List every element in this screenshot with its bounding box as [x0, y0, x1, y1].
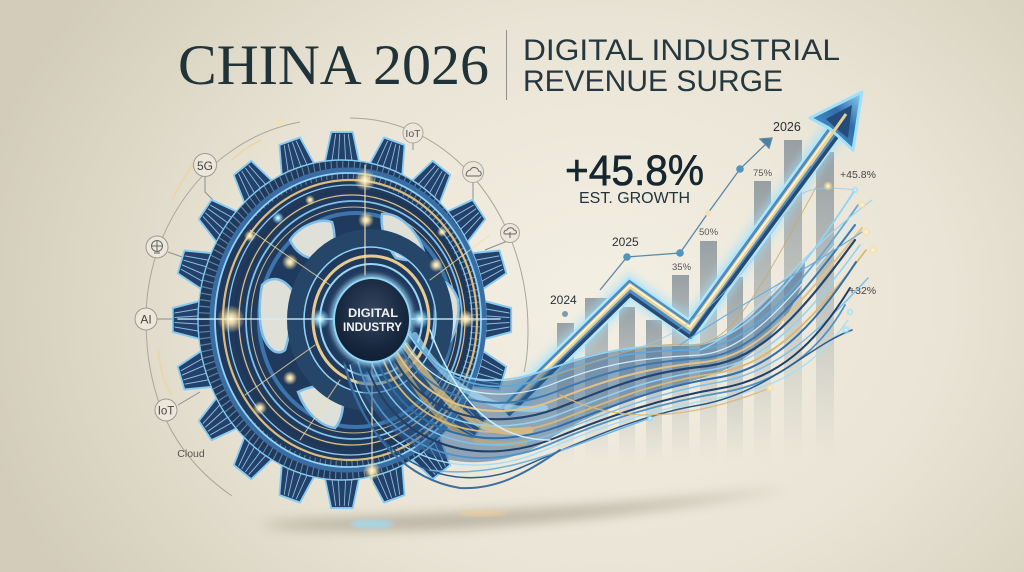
subtitle: Digital Industrial Revenue Surge: REVENUE SURGE	[523, 65, 783, 98]
gear teeth and body	[173, 132, 511, 508]
year and percent labels: +45.8%	[840, 169, 876, 181]
node: IoT left	[155, 399, 177, 421]
node: IoT left: IoT	[158, 406, 174, 418]
year and percent labels: 2024	[550, 293, 577, 307]
strand end sparks	[646, 181, 878, 422]
node: IoT top: IoT	[405, 128, 421, 140]
flare lines	[178, 165, 500, 495]
growth callout: EST. GROWTH	[579, 190, 690, 207]
year and percent labels: 35%	[672, 262, 692, 273]
growth callout: +45.8%	[565, 147, 704, 195]
year and percent labels: 75%	[753, 168, 773, 179]
technology orbit ring with nodes	[135, 118, 528, 496]
node: cloud icon	[462, 162, 484, 182]
inner hub rings	[296, 238, 444, 402]
hub: Digital Industry: INDUSTRY	[343, 320, 402, 334]
hub: Digital Industry	[330, 274, 414, 366]
node: AI	[135, 308, 157, 330]
year and percent labels: 2025	[612, 235, 639, 249]
flowing data strands	[344, 180, 878, 488]
node: globe brain icon	[146, 236, 168, 258]
year and percent labels: 50%	[699, 227, 719, 238]
main growth arrow	[505, 92, 862, 415]
label: Cloud: Cloud	[177, 448, 205, 460]
subtitle: Digital Industrial Revenue Surge	[523, 34, 840, 98]
year and percent labels: 2026	[773, 120, 801, 134]
concentric light rings	[212, 170, 484, 470]
title divider	[506, 30, 507, 100]
node: AI: AI	[140, 312, 152, 326]
ground shadow	[260, 488, 790, 530]
arrowhead	[810, 92, 862, 150]
hub: Digital Industry: DIGITAL	[348, 306, 398, 320]
node: 5G: 5G	[197, 159, 213, 173]
title: China 2026: CHINA 2026	[178, 34, 489, 97]
node: cloud upload icon	[500, 224, 520, 242]
gear spoke windows	[260, 214, 459, 428]
year and percent labels	[550, 120, 876, 307]
bar chart	[557, 140, 834, 463]
subtitle: Digital Industrial Revenue Surge: DIGITAL INDUSTRIAL	[523, 34, 840, 67]
node: 5G	[194, 154, 216, 176]
node: IoT top	[403, 123, 423, 143]
timeline line with dots	[562, 138, 772, 317]
sparkles	[217, 169, 475, 480]
year and percent labels: +32%	[849, 285, 876, 297]
gear	[173, 132, 511, 508]
